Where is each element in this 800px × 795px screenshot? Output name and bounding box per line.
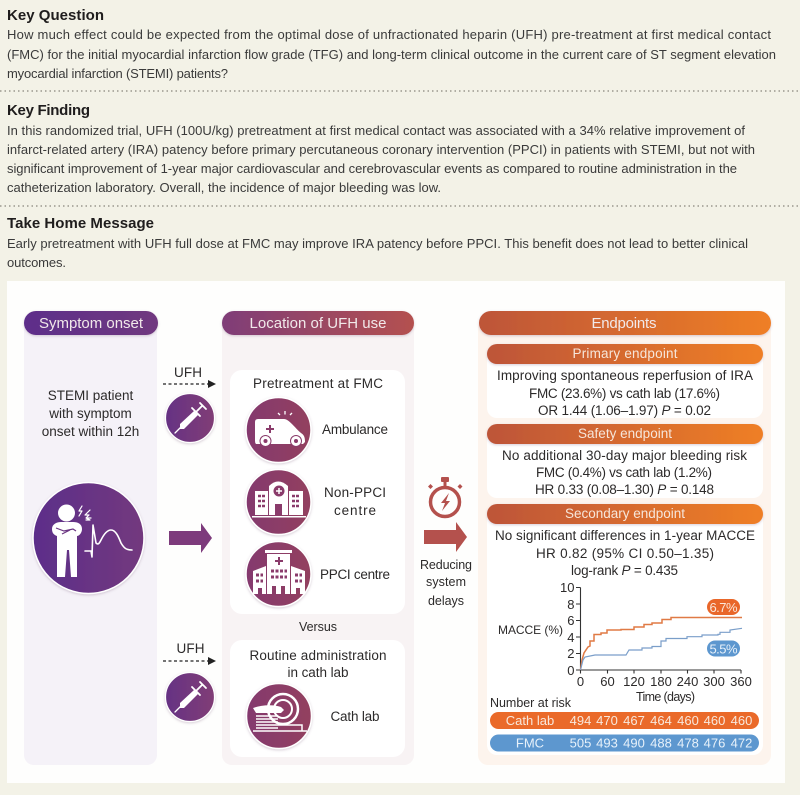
- label: cath lab: Cath lab: [330, 709, 380, 724]
- header: symptom onset: Symptom onset: [39, 315, 144, 332]
- risk row: cath lab: 460: [731, 713, 752, 728]
- risk row: FMC: [490, 734, 759, 752]
- sub-panel: safety endpoint: [487, 424, 763, 498]
- sub-panel: primary endpoint: [487, 344, 763, 418]
- header: endpoints: [479, 311, 771, 335]
- text: key question body: How much effect could be expected from the optimal dose of unfractionated heparin (UFH) pre-treatment at first medical contact: [7, 27, 771, 42]
- panel: endpoints: [478, 311, 771, 765]
- label: reducing system delays: system: [426, 575, 466, 589]
- icon: syringe lower: [166, 672, 214, 722]
- text: key finding body: significant improvement of 1-year major cardiovascular and cerebrovascular events as compared to routine administration in the: [7, 161, 737, 176]
- text: safety result: FMC (0.4%) vs cath lab (1.2%): [536, 465, 712, 480]
- heading: routine administration: in cath lab: [288, 665, 348, 680]
- heading: routine administration: [250, 648, 386, 680]
- text: primary result: FMC (23.6%) vs cath lab (17.6%): [529, 386, 720, 401]
- risk row: cath lab: [490, 712, 759, 729]
- text: take home body: Early pretreatment with UFH full dose at FMC may improve IRA patency before PPCI. This benefit does not lead to better clinical: [7, 236, 748, 251]
- y axis labels: 8: [567, 597, 574, 612]
- curve: FMC: [580, 628, 742, 670]
- text: key question body: myocardial infarction (STEMI) patients?: [7, 66, 228, 81]
- text: patient description: onset within 12h: [42, 424, 139, 439]
- label: versus: Versus: [299, 620, 337, 634]
- text: key finding body: In this randomized trial, UFH (100U/kg) pretreatment at first medical contact was associated with a 34% relative improvement of: [7, 123, 745, 138]
- white graphical abstract panel: [7, 281, 785, 783]
- heading: routine administration: Routine administration: [250, 648, 386, 663]
- header: secondary endpoint: Secondary endpoint: [565, 506, 685, 521]
- risk row: cath lab: 460: [704, 713, 725, 728]
- icon: stopwatch: [428, 477, 462, 516]
- x axis title: Time (days): [636, 690, 695, 704]
- connector: UFH upper: [163, 365, 216, 442]
- risk row: FMC: 478: [677, 736, 699, 750]
- badge: 5.5%: 5.5%: [710, 642, 738, 656]
- x axis labels: 180: [650, 674, 672, 689]
- risk row: FMC: 505: [570, 736, 591, 750]
- label: non-PPCI centre: [324, 485, 386, 518]
- risk row: cath lab: 460: [677, 713, 699, 728]
- label: ambulance: Ambulance: [322, 422, 388, 437]
- header: location of UFH use: [222, 311, 414, 335]
- x axis labels: 300: [703, 674, 725, 689]
- y axis labels: [560, 580, 574, 678]
- y axis labels: 2: [567, 646, 574, 661]
- text: primary result: OR 1.44 (1.06–1.97) P = 0.02: [538, 403, 711, 418]
- risk row: FMC: 476: [704, 736, 725, 750]
- section: take home message: [7, 215, 748, 270]
- panel: symptom onset: [24, 311, 158, 765]
- header: safety endpoint: [487, 424, 763, 444]
- risk row: FMC: FMC: [516, 736, 544, 750]
- text: take home body: [7, 236, 748, 270]
- arrow: location to endpoints: [424, 522, 467, 552]
- text: safety result: [502, 448, 747, 497]
- label: reducing system delays: [420, 558, 472, 608]
- x axis labels: 360: [730, 674, 752, 689]
- y axis labels: 4: [567, 630, 574, 645]
- icon: PPCI hospital: [246, 542, 311, 606]
- text: safety result: HR 0.33 (0.08–1.30) P = 0.148: [535, 482, 714, 497]
- text: safety result: No additional 30-day major bleeding risk: [502, 448, 747, 463]
- label: number at risk: Number at risk: [490, 696, 572, 710]
- label: reducing system delays: Reducing: [420, 558, 472, 572]
- text: secondary result: HR 0.82 (95% CI 0.50–1.35): [536, 546, 714, 561]
- risk row: cath lab: 464: [650, 713, 672, 728]
- risk row: FMC: 472: [731, 736, 752, 750]
- label: non-PPCI centre: centre: [334, 503, 376, 518]
- risk row: FMC: 493: [596, 736, 618, 750]
- icon: ambulance: [246, 398, 311, 462]
- y axis title: MACCE (%): [498, 623, 563, 637]
- icon: patient with chest pain and ECG: [33, 482, 144, 594]
- risk row: cath lab: 470: [596, 713, 618, 728]
- arrow: onset to location: [169, 523, 212, 553]
- icon: cath lab scanner: [246, 684, 312, 748]
- panel: location of UFH use: [222, 311, 414, 765]
- risk row: cath lab: 494: [570, 713, 591, 728]
- label: reducing system delays: delays: [428, 594, 464, 608]
- x axis labels: [577, 674, 752, 689]
- risk row: FMC: 490: [623, 736, 645, 750]
- header: safety endpoint: Safety endpoint: [578, 426, 672, 441]
- x axis labels: 0: [577, 674, 584, 689]
- icon: syringe upper: [166, 394, 214, 442]
- y axis labels: 10: [560, 580, 574, 595]
- heading: key finding: Key Finding: [7, 102, 90, 119]
- text: primary result: [497, 368, 753, 418]
- text: patient description: with symptom: [48, 406, 132, 421]
- text: key finding body: infarct-related artery (IRA) patency before primary percutaneous coronary intervention (PPCI) in patients with STEMI, but not with: [7, 142, 755, 157]
- box: routine administration in cath lab: [230, 640, 405, 757]
- header: location of UFH use: Location of UFH use: [250, 315, 386, 332]
- text: secondary result: [495, 528, 755, 578]
- x axis labels: 240: [677, 674, 698, 689]
- header: symptom onset: [24, 311, 158, 335]
- connector: UFH upper: UFH: [174, 365, 202, 380]
- text: secondary result: log-rank P = 0.435: [571, 563, 678, 578]
- heading: key question: Key Question: [7, 7, 104, 24]
- label: PPCI centre: PPCI centre: [320, 567, 390, 582]
- x axis labels: 60: [600, 674, 615, 689]
- chart: MACCE Kaplan-Meier: [498, 580, 752, 704]
- text: key finding body: catheterization laboratory. Overall, the incidence of major bleeding was low.: [7, 180, 441, 195]
- x axis labels: 120: [623, 674, 645, 689]
- section: key question: [7, 7, 776, 81]
- curve: cath lab: [580, 618, 742, 670]
- risk row: FMC: 488: [650, 736, 672, 750]
- icon: non-PPCI hospital: [246, 470, 311, 534]
- heading: take home message: Take Home Message: [7, 215, 154, 232]
- text: take home body: outcomes.: [7, 255, 66, 270]
- label: non-PPCI centre: Non-PPCI: [324, 485, 386, 500]
- section: key finding: [7, 102, 755, 195]
- connector: UFH lower: [163, 641, 216, 722]
- text: patient description: [42, 388, 139, 439]
- y axis labels: 6: [567, 613, 574, 628]
- sub-panel: secondary endpoint: [487, 504, 763, 755]
- badge: 6.7%: 6.7%: [710, 600, 738, 615]
- box: pretreatment at FMC: [230, 370, 405, 614]
- header: primary endpoint: Primary endpoint: [572, 346, 678, 361]
- heading: pretreatment at FMC: Pretreatment at FMC: [253, 376, 383, 391]
- text: secondary result: No significant differences in 1-year MACCE: [495, 528, 755, 543]
- connector: UFH lower: UFH: [176, 641, 204, 656]
- header: secondary endpoint: [487, 504, 763, 524]
- text: patient description: STEMI patient: [48, 388, 134, 403]
- header: endpoints: Endpoints: [592, 315, 656, 332]
- risk row: cath lab: 467: [623, 713, 645, 728]
- text: primary result: Improving spontaneous reperfusion of IRA: [497, 368, 753, 383]
- y axis labels: 0: [567, 663, 574, 678]
- text: key finding body: [7, 123, 755, 195]
- header: primary endpoint: [487, 344, 763, 364]
- text: key question body: (FMC) for the initial myocardial infarction flow grade (TFG) and long-term clinical outcome in the current care of ST segment elevation: [7, 47, 776, 62]
- risk row: cath lab: Cath lab: [506, 713, 554, 728]
- text: key question body: [7, 27, 776, 81]
